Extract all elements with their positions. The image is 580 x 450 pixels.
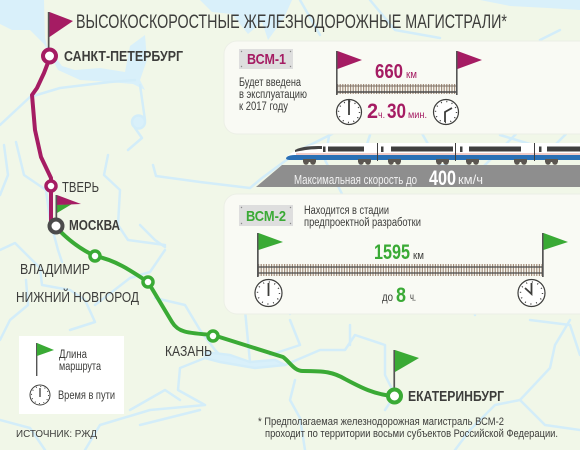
label: Москва: МОСКВА	[69, 218, 120, 234]
legend: flag icon	[36, 343, 54, 376]
travel time: до 8 ч.: 8	[396, 284, 406, 307]
panel: ВСМ-1 background	[224, 41, 580, 134]
label: Екатеринбург: ЕКАТЕРИНБУРГ	[408, 389, 504, 405]
plate: ВСМ-2: ВСМ-2	[246, 208, 286, 225]
plate: ВСМ-1: ВСМ-1	[247, 51, 286, 68]
legend: clock icon	[30, 385, 50, 405]
travel time: 2 ч. 30 мин.: 30	[387, 100, 406, 123]
flag: ВСМ-2 start	[257, 233, 283, 277]
marker: Санкт-Петербург	[43, 50, 56, 62]
legend: route length label: Длина	[59, 349, 88, 361]
text: ВСМ-2 status: предпроектной разработки	[304, 217, 421, 229]
source: ИСТОЧНИК: РЖД	[16, 428, 97, 440]
travel time: 2 ч. 30 мин.	[367, 100, 427, 123]
distance: 1595 км: км	[413, 250, 424, 262]
track: ВСМ-2	[258, 267, 543, 273]
route: Санкт-Петербург to Москва	[32, 60, 51, 225]
label: Нижний Новгород: НИЖНИЙ НОВГОРОД	[16, 288, 139, 306]
flag: Санкт-Петербург	[48, 12, 73, 50]
label: Владимир: ВЛАДИМИР	[20, 262, 90, 278]
travel time: до 8 ч.	[382, 284, 416, 307]
travel time: до 8 ч.: до	[382, 292, 393, 304]
marker: Нижний Новгород	[143, 277, 153, 287]
footnote	[258, 416, 558, 440]
flag: ВСМ-2 end	[542, 233, 568, 277]
text: ВСМ-2 status: Находится в стадии	[304, 205, 389, 217]
text: ВСМ-1 status: в эксплуатацию	[239, 89, 307, 101]
icon: clock end ВСМ-1	[434, 100, 458, 124]
text: ВСМ-2 status	[304, 205, 421, 229]
distance: 660 км: 660	[375, 61, 403, 83]
travel time: 2 ч. 30 мин.: 2	[367, 100, 378, 123]
travel time: 2 ч. 30 мин.: ч.	[378, 109, 385, 121]
icon: clock end ВСМ-2	[518, 280, 545, 306]
text: ВСМ-1 status: Будет введена	[239, 77, 301, 89]
flags: Москва	[56, 195, 81, 219]
route: Москва to Екатеринбург	[56, 227, 394, 396]
marker: Тверь	[46, 181, 56, 191]
distance: 1595 км: 1595	[374, 241, 410, 264]
track bed with max speed	[256, 165, 580, 190]
legend: route length label: маршрута	[59, 361, 101, 373]
distance: 660 км: км	[406, 69, 417, 81]
icon: clock start ВСМ-1	[336, 100, 362, 124]
track bed with max speed: Максимальная скорость до	[294, 172, 417, 187]
track bed with max speed: 400	[429, 167, 456, 190]
track bed with max speed: км/ч	[458, 172, 483, 187]
travel time: 2 ч. 30 мин.: мин.	[408, 109, 427, 121]
train	[286, 143, 580, 165]
label: Казань: КАЗАНЬ	[165, 344, 212, 360]
marker: Екатеринбург	[388, 390, 401, 402]
label: Тверь: ТВЕРЬ	[62, 180, 99, 196]
track: ВСМ-1	[337, 86, 457, 92]
flag: Екатеринбург	[393, 350, 419, 388]
marker: Владимир	[90, 251, 100, 261]
footnote: * Предполагаемая железнодорожная магистраль ВСМ-2	[258, 416, 504, 428]
icon: clock start ВСМ-2	[255, 280, 282, 306]
legend	[19, 336, 124, 414]
text: ВСМ-1 status	[239, 77, 307, 113]
flag: ВСМ-1 start	[336, 51, 362, 95]
marker: Москва	[50, 220, 62, 232]
legend: travel time label: Время в пути	[58, 390, 115, 402]
flag: ВСМ-1 end	[456, 51, 482, 95]
legend: route length label	[59, 349, 101, 373]
marker: Казань	[208, 331, 218, 341]
label: Санкт-Петербург: САНКТ-ПЕТЕРБУРГ	[64, 49, 183, 65]
text: ВСМ-1 status: к 2017 году	[239, 101, 288, 113]
panel: ВСМ-2 background	[224, 194, 580, 314]
travel time: до 8 ч.: ч.	[410, 292, 416, 304]
